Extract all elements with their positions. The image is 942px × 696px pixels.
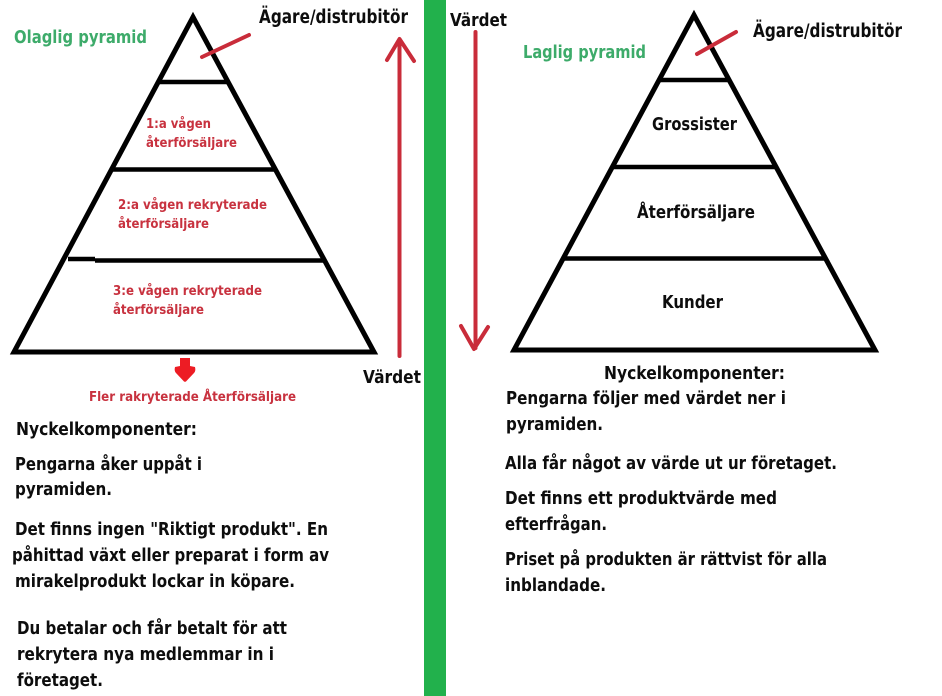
label: owner/distributor: Ägare/distrubitör — [259, 6, 409, 28]
tier label: wholesalers: Grossister — [652, 115, 737, 135]
icon: small red down arrow — [175, 358, 195, 382]
point: paid to recruit: företaget. — [17, 671, 103, 691]
point: no real product: påhittad växt eller preparat i form av — [12, 544, 329, 566]
point: money moves up: pyramiden. — [15, 480, 112, 500]
point: everyone gets value: Alla får något av värde ut ur företaget. — [505, 452, 837, 474]
tier label: third wave: 3:e vågen rekryterade — [113, 282, 262, 299]
label: value, right: Värdet — [450, 11, 507, 31]
center divider: green bar — [424, 0, 446, 696]
point: paid to recruit: Du betalar och får betalt för att — [17, 617, 287, 639]
pyramid diagram: legal — [514, 15, 875, 350]
point: fair price: inblandade. — [505, 576, 606, 596]
tier label: third wave: återförsäljare — [113, 301, 204, 318]
title: Olaglig pyramid: Olaglig pyramid — [14, 27, 147, 48]
point: money moves up: Pengarna åker uppåt i — [15, 453, 202, 475]
tier label: second wave: 2:a vågen rekryterade — [118, 196, 267, 213]
text block: key components, illegal — [12, 420, 329, 691]
title: Laglig pyramid: Laglig pyramid — [523, 42, 646, 63]
tier label: first wave: återförsäljare — [146, 134, 237, 151]
tier label: customers: Kunder — [662, 293, 723, 313]
panel: legal pyramid — [450, 11, 903, 596]
point: money follows value: pyramiden. — [506, 415, 603, 435]
owner pointer line — [697, 32, 736, 54]
heading: key components: Nyckelkomponenter: — [604, 364, 785, 384]
point: product value with demand: Det finns ett produktvärde med — [505, 489, 777, 509]
tier label: second wave: återförsäljare — [118, 215, 209, 232]
point: fair price: Priset på produkten är rättvist för alla — [505, 548, 827, 570]
point: money follows value: Pengarna följer med värdet ner i — [506, 389, 786, 409]
text block: key components, legal — [505, 364, 837, 596]
point: no real product: mirakelprodukt lockar in köpare. — [15, 572, 295, 592]
heading: key components: Nyckelkomponenter: — [16, 420, 197, 440]
point: no real product: Det finns ingen "Riktigt produkt". En — [15, 520, 328, 540]
panel: illegal pyramid — [12, 6, 421, 691]
owner pointer line — [202, 35, 249, 57]
arrow: value moves down — [461, 32, 488, 349]
label: value, left: Värdet — [363, 368, 421, 388]
pyramid diagram: illegal — [14, 17, 374, 352]
point: product value with demand: efterfrågan. — [505, 513, 607, 535]
label: owner/distributor: Ägare/distrubitör — [753, 20, 903, 42]
label: more recruited resellers: Fler rakryterade Återförsäljare — [89, 388, 296, 405]
arrow: value moves up — [387, 39, 414, 356]
tier label: first wave: 1:a vågen — [146, 115, 211, 132]
point: paid to recruit: rekrytera nya medlemmar in i — [17, 645, 274, 665]
tier label: resellers: Återförsäljare — [637, 200, 755, 223]
